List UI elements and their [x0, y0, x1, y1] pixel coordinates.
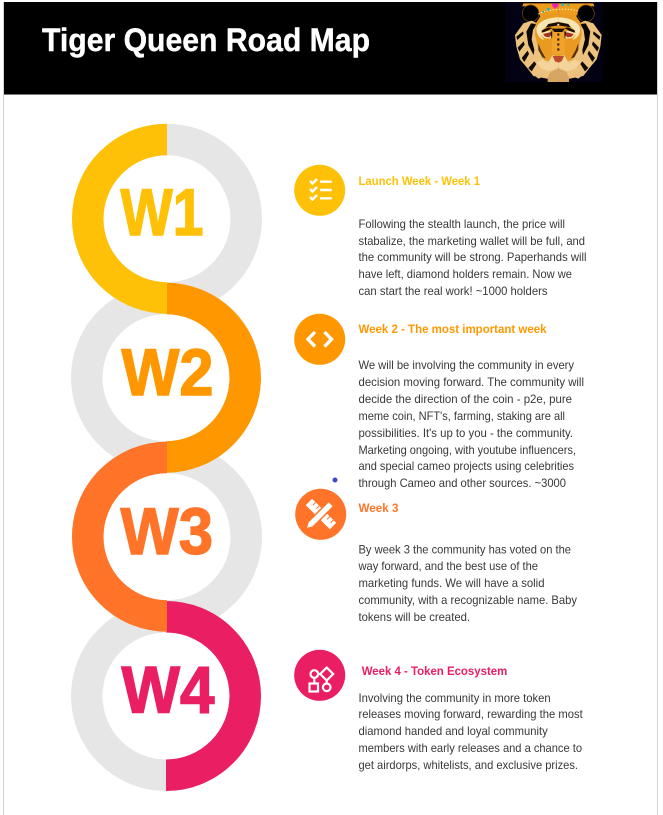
icon: shapes flow	[294, 650, 345, 701]
section: week 1	[358, 174, 586, 298]
body: week 3: tokens will be created.	[358, 611, 470, 624]
section: week 3	[358, 501, 577, 624]
body: week 4: members with early releases and a chance to	[358, 742, 582, 755]
heading: week 1: Launch Week - Week 1	[358, 174, 480, 188]
body: week 2: through Cameo and other sources. ~3000	[358, 477, 566, 490]
ruler	[306, 499, 336, 529]
icon: crossed ruler and pencil	[295, 489, 346, 540]
body: week 1	[358, 218, 586, 298]
label W3: W3	[120, 494, 213, 568]
heading: week 3: Week 3	[358, 501, 399, 515]
icon: tiger queen head	[505, 2, 602, 82]
header banner	[4, 2, 657, 95]
ring W4 pink half	[166, 617, 245, 775]
pencil	[304, 501, 334, 531]
body: week 3: way forward, and the best use of the	[358, 560, 538, 573]
title: Tiger Queen Road Map	[42, 22, 370, 58]
body: week 1: the community will be strong. Paperhands will	[358, 251, 586, 264]
body: week 2: and special cameo projects using celebrities	[358, 460, 574, 473]
heading: week 4: Week 4 - Token Ecosystem	[362, 664, 507, 678]
body: week 2: Marketing ongoing, with youtube influencers,	[358, 444, 576, 457]
body: week 3: By week 3 the community has voted on the	[358, 544, 571, 556]
body: week 4	[358, 692, 583, 772]
body: week 2: decide the direction of the coin - p2e, pure	[358, 393, 572, 406]
body: week 2: meme coin, NFT's, farming, staking are all	[358, 410, 565, 423]
body: week 2	[358, 359, 584, 490]
body: week 3: community, with a recognizable name. Baby	[358, 594, 577, 607]
body: week 1: have left, diamond holders remain. Now we	[358, 268, 572, 281]
decorative dot	[332, 478, 338, 482]
section: week 4	[358, 664, 583, 772]
body: week 1: can start the real work! ~1000 holders	[358, 285, 548, 298]
ring W2 orange half	[166, 298, 245, 457]
body: week 1: stabalize, the marketing wallet will be full, and	[358, 235, 585, 248]
label W2: W2	[122, 335, 214, 409]
icon: code brackets	[294, 314, 345, 365]
icon: checklist	[294, 165, 345, 216]
ring W1 yellow half	[88, 139, 167, 298]
body: week 3: marketing funds. We will have a solid	[358, 577, 544, 590]
body: week 4: diamond handed and loyal community	[358, 725, 548, 738]
label W4: W4	[122, 653, 215, 727]
heading: week 2: Week 2 - The most important week	[358, 322, 547, 336]
body: week 4: releases moving forward, rewarding the most	[358, 708, 583, 721]
ring W3 deep orange half	[88, 457, 167, 616]
body: week 2: decision moving forward. The community will	[358, 376, 584, 389]
body: week 2: We will be involving the community in every	[358, 359, 574, 372]
body: week 1: Following the stealth launch, the price will	[358, 218, 565, 231]
section: week 2	[358, 322, 584, 490]
body: week 4: Involving the community in more token	[358, 692, 551, 705]
label W1: W1	[120, 175, 204, 249]
body: week 3	[358, 544, 577, 624]
body: week 4: get airdorps, whitelists, and exclusive prizes.	[358, 759, 578, 772]
body: week 2: possibilities. It's up to you - the community.	[358, 427, 573, 440]
ring track: grey circles	[87, 139, 246, 775]
